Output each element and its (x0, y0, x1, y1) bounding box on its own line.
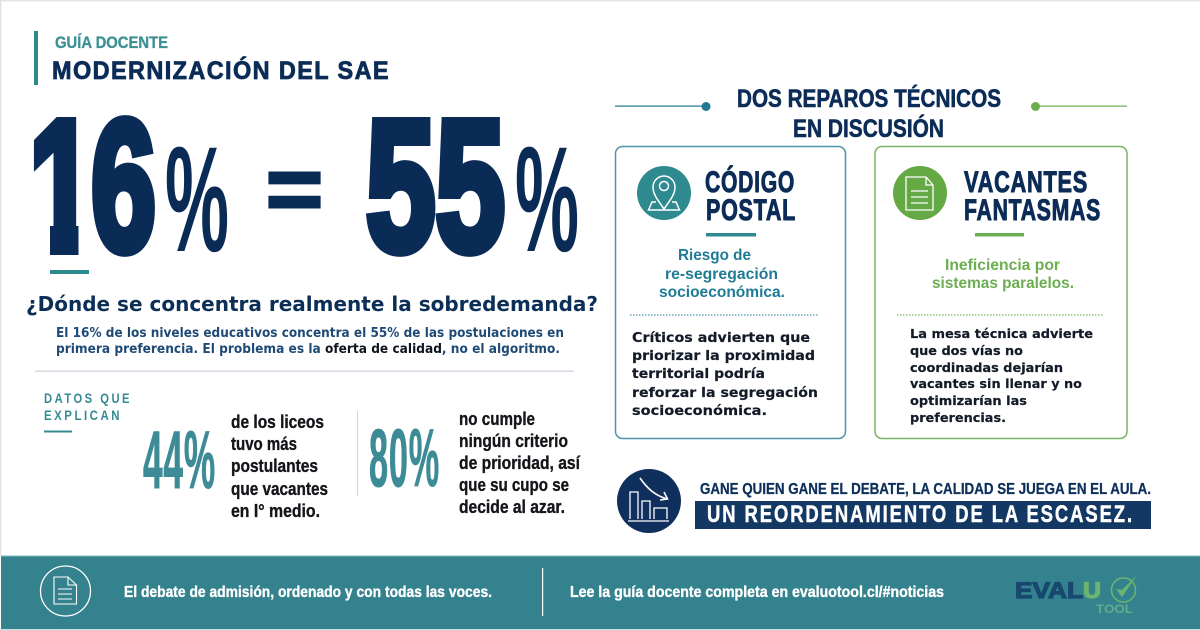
icon: map pin (637, 166, 691, 220)
panel: vacantes fantasmas: Ineficiencia por (945, 257, 1060, 274)
stat description: liceos: tuvo más (231, 434, 297, 454)
logo: evalu tool (1015, 575, 1137, 616)
panel: vacantes fantasmas: coordinadas dejarían (910, 360, 1063, 375)
big statistic: 16% = 55%: 6 (91, 83, 156, 290)
panel: código postal: re-segregación (665, 266, 778, 283)
big statistic: 16% = 55%: = (266, 140, 323, 240)
section heading: dos reparos técnicos (615, 84, 1127, 143)
stat: 80% (369, 409, 581, 517)
stat description: prioridad: no cumple (459, 409, 535, 429)
logo: evalu tool: TOOL (1096, 602, 1133, 616)
stat description: liceos: que vacantes (231, 479, 328, 499)
panel: vacantes fantasmas: optimizarían las (910, 393, 1027, 408)
section heading: dos reparos técnicos: EN DISCUSIÓN (793, 113, 944, 143)
panel: vacantes fantasmas: VACANTES (964, 166, 1088, 199)
panel: código postal: reforzar la segregación (632, 385, 818, 401)
explanatory paragraph: primera preferencia. El problema es la oferta de calidad, no el algoritmo. (56, 342, 560, 357)
stat description: prioridad: que su cupo se (459, 475, 569, 495)
stat: 80%: 80% (369, 413, 440, 504)
big statistic: 16% = 55%: 55 (366, 83, 505, 290)
panel: código postal: POSTAL (706, 194, 796, 227)
stat description: prioridad: de prioridad, así (459, 453, 581, 473)
explanatory paragraph (56, 326, 564, 357)
stat description: liceos: en I° medio. (231, 501, 320, 521)
panel: código postal: territorial podría (632, 366, 765, 382)
header: guide title (34, 31, 390, 85)
panel: código postal: priorizar la proximidad (632, 348, 815, 364)
header: guide title: GUÍA DOCENTE (55, 33, 168, 52)
text: % (515, 115, 579, 283)
big statistic: 16% = 55%: 1 (29, 83, 95, 290)
section heading: dos reparos técnicos: DOS REPAROS TÉCNICOS (737, 84, 1001, 113)
label: datos que explican: DATOS QUE (44, 391, 132, 406)
stat description: liceos: postulantes (231, 456, 318, 476)
big statistic: 16% = 55% (34, 115, 578, 274)
logo: evalu tool: EVAL (1015, 578, 1083, 603)
footer band: Lee la guía docente completa en evaluotool.cl/#noticias (570, 584, 944, 601)
icon: document (893, 166, 947, 220)
panel: código postal: socioeconómica. (632, 403, 767, 419)
icon: document in circle (40, 566, 90, 616)
panel: vacantes fantasmas: preferencias. (910, 410, 1006, 425)
explanatory paragraph: El 16% de los niveles educativos concentra el 55% de las postulaciones en (56, 326, 564, 341)
panel: vacantes fantasmas: La mesa técnica advierte (910, 326, 1093, 341)
panel: vacantes fantasmas (875, 146, 1127, 438)
stat description: prioridad: decide al azar. (459, 497, 565, 517)
panel: código postal: Críticos advierten que (632, 330, 810, 346)
footer band (1, 556, 1200, 629)
logo: evalu tool: U (1083, 578, 1101, 603)
stat description: prioridad (459, 409, 581, 517)
panel: código postal (616, 146, 846, 438)
stat description: liceos: de los liceos (231, 412, 324, 432)
footer band: El debate de admisión, ordenado y con todas las voces. (124, 584, 492, 601)
panel: código postal: CÓDIGO (705, 165, 795, 199)
header: guide title: MODERNIZACIÓN DEL SAE (52, 55, 390, 85)
stat description: prioridad: ningún criterio (459, 431, 568, 451)
icon: falling bar chart (617, 469, 681, 533)
panel: vacantes fantasmas: FANTASMAS (964, 194, 1101, 227)
stat description: liceos (231, 412, 328, 521)
panel: vacantes fantasmas: vacantes sin llenar y no (910, 376, 1082, 391)
label: datos que explican (44, 391, 132, 432)
panel: código postal: Riesgo de (678, 247, 751, 264)
panel: código postal: socioeconómica. (659, 284, 785, 301)
callout: reordenamiento de la escasez (617, 469, 1151, 533)
question heading: ¿Dónde se concentra realmente la sobredemanda? (26, 292, 598, 316)
label: datos que explican: EXPLICAN (44, 408, 122, 423)
big statistic: 16% = 55%: % (165, 115, 229, 283)
stat: 44%: 44% (143, 415, 216, 506)
panel: vacantes fantasmas: sistemas paralelos. (932, 275, 1074, 292)
panel: vacantes fantasmas: que dos vías no (910, 343, 1023, 358)
